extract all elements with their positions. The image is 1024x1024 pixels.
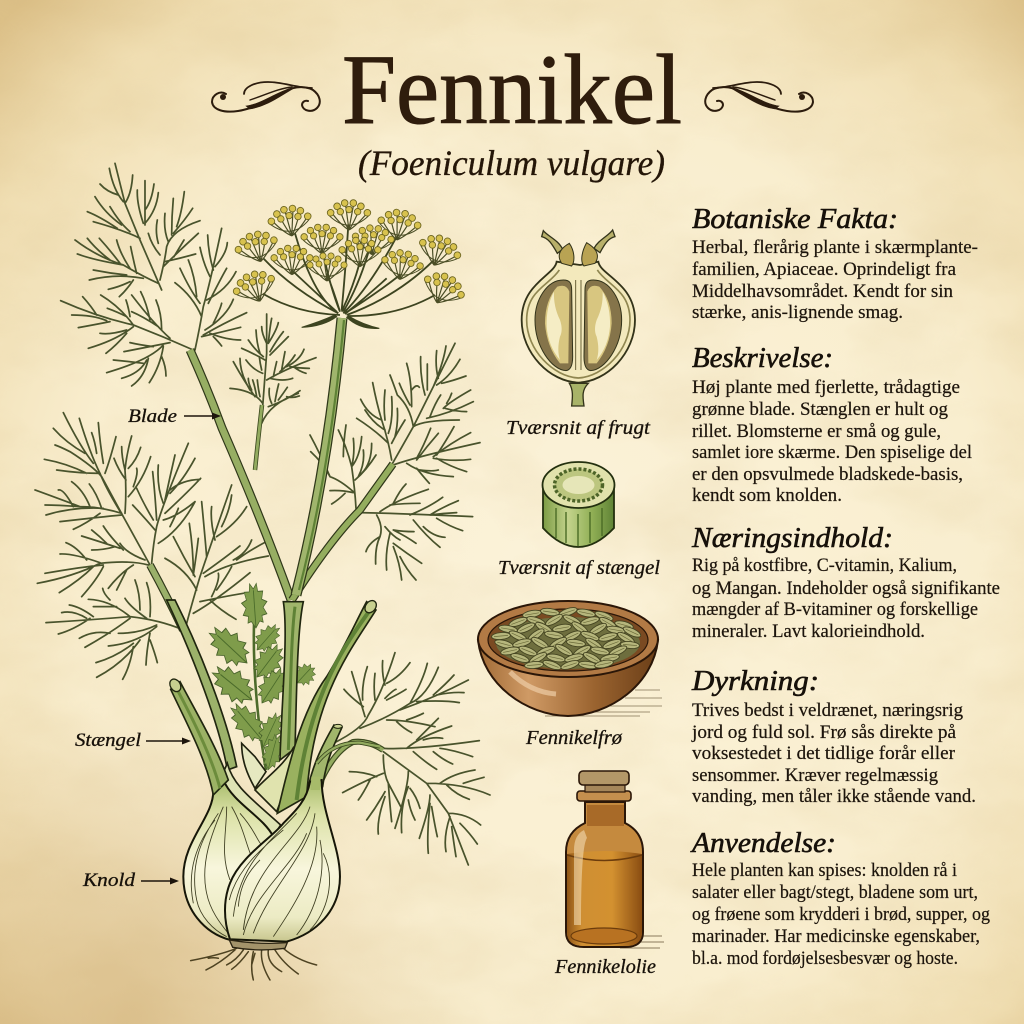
section: Beskrivelse bbox=[692, 343, 972, 506]
section: Beskrivelse: Beskrivelse: bbox=[692, 343, 833, 374]
label: Stængel: Stængel bbox=[75, 731, 141, 751]
bulb and lower stalks bbox=[167, 598, 380, 980]
caption: Tværsnit af frugt: Tværsnit af frugt bbox=[506, 417, 650, 439]
section: Dyrkning: Trives bedst i veldrænet, næringsrig bbox=[692, 701, 963, 721]
section: Beskrivelse: samlet iore skærme. Den spiselige del bbox=[692, 443, 972, 463]
section: Næringsindhold: mineraler. Lavt kalorieindhold. bbox=[692, 622, 925, 642]
roots bbox=[191, 948, 317, 980]
section: Dyrkning bbox=[691, 666, 976, 807]
frond: right bbox=[310, 343, 480, 580]
label: Knold: Knold bbox=[82, 871, 136, 891]
section: Anvendelse: Hele planten kan spises: knolden rå i bbox=[692, 861, 957, 881]
section: Næringsindhold: og Mangan. Indeholder også signifikante bbox=[692, 579, 1000, 599]
section: Beskrivelse: er den opsvulmede bladskede-basis, bbox=[692, 465, 963, 485]
section: Næringsindhold: Rig på kostfibre, C-vitamin, Kalium, bbox=[692, 556, 957, 576]
label: Blade: Blade bbox=[128, 407, 177, 427]
section: Anvendelse: og frøene som krydderi i brød, supper, og bbox=[692, 905, 990, 925]
section: Næringsindhold bbox=[691, 523, 1000, 642]
section: Botaniske Fakta bbox=[692, 204, 978, 323]
section: Dyrkning: jord og fuld sol. Frø sås direkte på bbox=[691, 723, 956, 743]
section: Anvendelse: marinader. Har medicinske egenskaber, bbox=[692, 927, 980, 947]
bulb base bbox=[229, 940, 287, 950]
section: Næringsindhold: mængder af B-vitaminer og forskellige bbox=[692, 600, 978, 620]
fennel plant illustration bbox=[35, 163, 490, 980]
frond: lower right bbox=[333, 653, 490, 865]
label: Stængel bbox=[75, 731, 191, 751]
icon: fruit cross-section bbox=[522, 230, 635, 406]
section: Dyrkning: vanding, men tåler ikke stående vand. bbox=[692, 787, 976, 807]
right flourish bbox=[705, 82, 813, 112]
section: Beskrivelse: grønne blade. Stænglen er hult og bbox=[692, 400, 948, 420]
section: Botaniske Fakta: familien, Apiaceae. Oprindeligt fra bbox=[692, 260, 956, 280]
bulb right lobe bbox=[225, 780, 340, 942]
section: Anvendelse: Anvendelse: bbox=[690, 828, 836, 859]
bulb left lobe bbox=[183, 780, 273, 940]
section: Anvendelse: salater eller bagt/stegt, bladene som urt, bbox=[692, 883, 978, 903]
cut stalk short bbox=[308, 724, 342, 787]
section: Botaniske Fakta: stærke, anis-lignende smag. bbox=[692, 303, 903, 323]
bulb right ribs bbox=[229, 807, 329, 937]
section: Næringsindhold: Næringsindhold: bbox=[691, 523, 893, 554]
bulb left ribs bbox=[191, 807, 262, 937]
icon: bowl of fennel seeds bbox=[478, 601, 662, 716]
section: Dyrkning: Dyrkning: bbox=[691, 666, 819, 697]
neck patch bbox=[311, 777, 321, 790]
section: Dyrkning: voksestedet i det tidlige forår eller bbox=[692, 744, 955, 764]
caption: Fennikelfrø: Fennikelfrø bbox=[525, 727, 623, 749]
thin frond stalk to the right bbox=[317, 743, 380, 763]
left flourish bbox=[212, 82, 320, 112]
inner sheaths bbox=[220, 743, 294, 837]
cut stalk right bbox=[277, 598, 379, 813]
title: Fennikel bbox=[342, 34, 682, 145]
young parsley-like leaf bbox=[202, 583, 320, 773]
frond: small centre bbox=[230, 314, 316, 423]
section: Anvendelse bbox=[690, 828, 990, 969]
cut stalk left bbox=[168, 677, 228, 795]
section: Dyrkning: sensommer. Kræver regelmæssig bbox=[692, 766, 938, 786]
section: Botaniske Fakta: Herbal, flerårig plante i skærmplante- bbox=[692, 238, 978, 258]
label: Knold bbox=[82, 871, 179, 891]
caption: Fennikelolie: Fennikelolie bbox=[554, 956, 656, 978]
icon: stem cross-section bbox=[542, 462, 614, 547]
icon: oil bottle bbox=[566, 771, 664, 948]
umbel flower head bbox=[229, 200, 470, 329]
long frond stalk bbox=[167, 600, 237, 770]
main stem bbox=[280, 602, 303, 760]
subtitle: (Foeniculum vulgare) bbox=[358, 143, 665, 183]
section: Beskrivelse: Høj plante med fjerlette, trådagtige bbox=[692, 378, 960, 398]
section: Beskrivelse: rillet. Blomsterne er små og gule, bbox=[692, 422, 941, 442]
frond: left middle bbox=[35, 413, 268, 679]
section: Botaniske Fakta: Botaniske Fakta: bbox=[692, 204, 898, 235]
upper stalks bbox=[150, 318, 393, 790]
section: Botaniske Fakta: Middelhavsområdet. Kendt for sin bbox=[692, 282, 953, 302]
section: Anvendelse: bl.a. mod fordøjelsesbesvær og hoste. bbox=[692, 949, 958, 969]
label: Blade bbox=[128, 407, 221, 427]
caption: Tværsnit af stængel: Tværsnit af stængel bbox=[498, 557, 660, 579]
frond: upper left bbox=[61, 163, 247, 386]
section: Beskrivelse: kendt som knolden. bbox=[692, 486, 842, 506]
